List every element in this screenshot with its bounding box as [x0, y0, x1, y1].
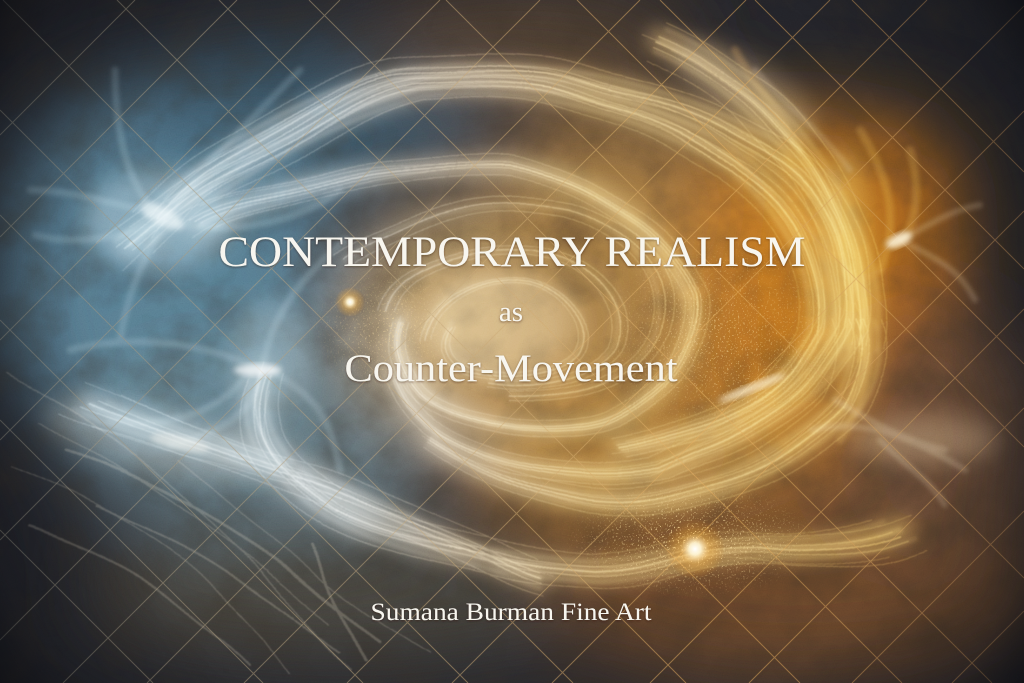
blue flare wisps	[30, 70, 345, 470]
swirl glow bands	[90, 40, 900, 578]
subtitle: Counter-Movement	[344, 347, 678, 390]
lower left sweeping strands	[10, 370, 430, 670]
swirl fine filaments	[61, 18, 927, 600]
light flares	[137, 197, 914, 579]
soft wisp clouds	[35, 24, 1000, 554]
swirl mid strands	[73, 29, 916, 589]
orange flame wisps	[735, 50, 980, 505]
gold sparkle dust	[310, 230, 850, 600]
title: CONTEMPORARY REALISM	[218, 229, 806, 276]
connecting word: as	[499, 296, 523, 328]
artist credit: Sumana Burman Fine Art	[370, 599, 652, 626]
